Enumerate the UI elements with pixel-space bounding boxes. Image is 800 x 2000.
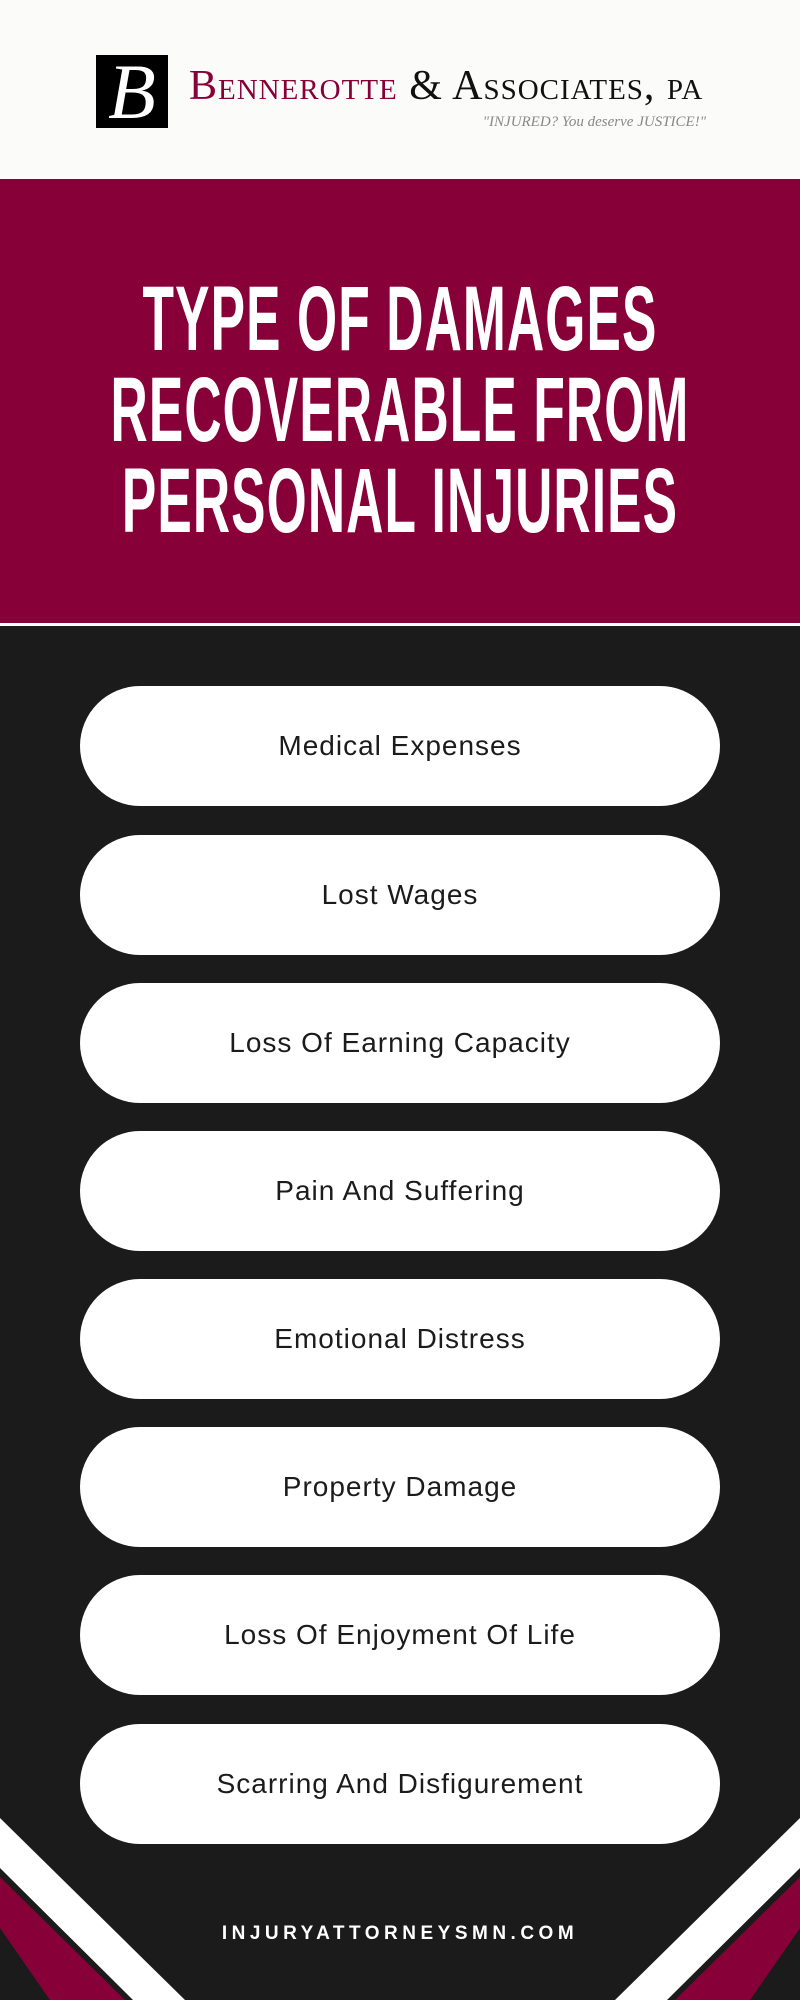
- pill: Scarring And Disfigurement: [80, 1724, 720, 1844]
- pill: Loss Of Enjoyment Of Life: Loss Of Enjoyment Of Life: [224, 1619, 576, 1650]
- pill: Property Damage: [80, 1427, 720, 1547]
- pill: Loss Of Earning Capacity: [80, 983, 720, 1103]
- pill: Pain And Suffering: Pain And Suffering: [275, 1175, 525, 1206]
- icon: B logo box: B: [108, 48, 156, 135]
- pill: Pain And Suffering: [80, 1131, 720, 1251]
- pill: Loss Of Earning Capacity: Loss Of Earning Capacity: [229, 1027, 571, 1058]
- title: TYPE OF DAMAGES: [143, 268, 657, 370]
- header: logo: [0, 0, 800, 179]
- tagline: "INJURED? You deserve JUSTICE!": [483, 114, 706, 130]
- icon: B logo box: [96, 55, 168, 128]
- pill: Emotional Distress: [80, 1279, 720, 1399]
- title: RECOVERABLE FROM: [111, 359, 689, 461]
- pill: Emotional Distress: Emotional Distress: [274, 1323, 526, 1354]
- pill: Scarring And Disfigurement: Scarring And Disfigurement: [217, 1768, 583, 1799]
- pill: Property Damage: Property Damage: [283, 1471, 517, 1502]
- pill: Loss Of Enjoyment Of Life: [80, 1575, 720, 1695]
- footer url: INJURYATTORNEYSMN.COM: [222, 1923, 578, 1944]
- pill: Medical Expenses: Medical Expenses: [278, 730, 522, 761]
- pill: Medical Expenses: [80, 686, 720, 806]
- title: PERSONAL INJURIES: [122, 450, 678, 552]
- banner: [0, 179, 800, 626]
- title: [111, 268, 689, 552]
- pill: Lost Wages: [80, 835, 720, 955]
- pill: Lost Wages: Lost Wages: [322, 879, 478, 910]
- logo name: Bennerotte & Associates, pa: [189, 63, 703, 109]
